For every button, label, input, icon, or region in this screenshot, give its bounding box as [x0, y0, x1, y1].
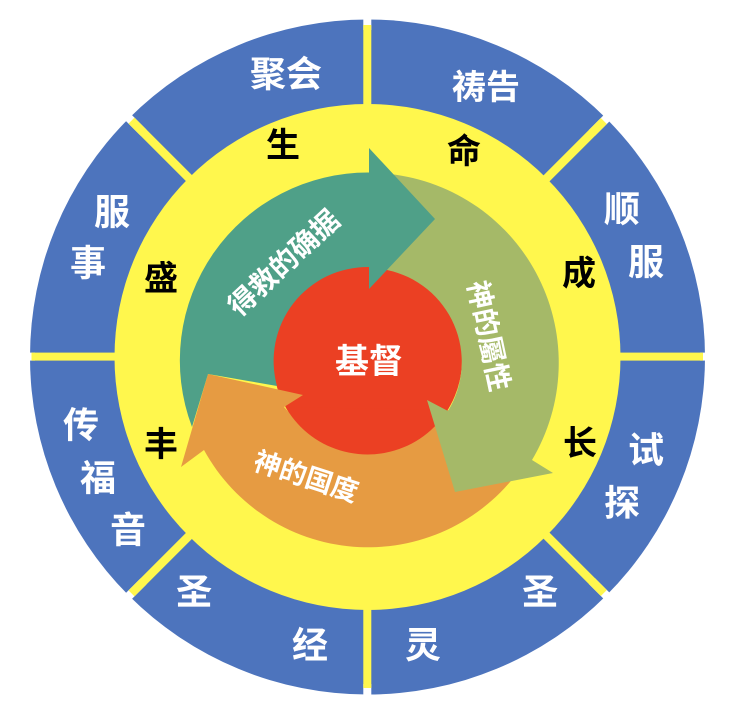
label: 传福音	[63, 404, 146, 550]
label: 聚会: 会	[286, 54, 322, 94]
label: 圣经	[176, 572, 328, 666]
label: 聚会: 聚	[250, 54, 286, 94]
label: 祷告: 祷	[452, 69, 486, 107]
label: 生命成长丰盛: 命	[447, 133, 481, 171]
label: 圣经: 经	[292, 624, 328, 666]
label: 圣灵: 灵	[405, 624, 441, 666]
arrow: assurance of salvation (teal)	[180, 148, 435, 427]
label: 祷告: 告	[486, 69, 520, 107]
label: 生命成长丰盛: 丰	[144, 426, 178, 464]
label: 服事: 服	[94, 192, 130, 232]
centre circle: Christ	[273, 266, 462, 454]
label: 试探: 探	[604, 482, 640, 524]
label: 生命成长丰盛: 长	[563, 425, 597, 463]
label: 传福音: 传	[63, 404, 99, 446]
label: 生命成长丰盛: 生	[266, 127, 300, 165]
label: 得救的确据: 得救的确据	[222, 204, 346, 322]
yellow ring: growth of life	[114, 104, 620, 610]
centre circle: lower edge over orange	[286, 407, 448, 454]
label: 生命成长丰盛: 成	[562, 255, 596, 293]
label: 服事: 事	[70, 242, 106, 284]
label: 传福音: 福	[80, 458, 116, 498]
label: 顺服	[604, 188, 664, 282]
label: 圣经: 圣	[176, 572, 212, 612]
label: 传福音: 音	[110, 510, 146, 550]
label: 聚会	[250, 54, 322, 94]
label: 试探	[604, 430, 664, 524]
label: 生命成长丰盛	[144, 127, 597, 464]
label: 顺服: 服	[628, 242, 664, 282]
label: 基督: 基督	[335, 343, 403, 381]
label: 祷告	[452, 69, 520, 107]
label: 顺服: 顺	[604, 188, 640, 230]
arrow: kingdom of God (orange)	[181, 374, 523, 547]
label: 圣灵	[405, 572, 558, 666]
label: 试探: 试	[628, 430, 664, 470]
label: 生命成长丰盛: 盛	[144, 260, 178, 298]
label: 服事	[70, 192, 130, 284]
label: 神的国度: 神的国度	[250, 446, 362, 508]
label: 神的屬性: 神的屬性	[462, 278, 515, 394]
arrow: attributes of God (olive)	[387, 174, 559, 492]
label: 圣灵: 圣	[522, 572, 558, 612]
